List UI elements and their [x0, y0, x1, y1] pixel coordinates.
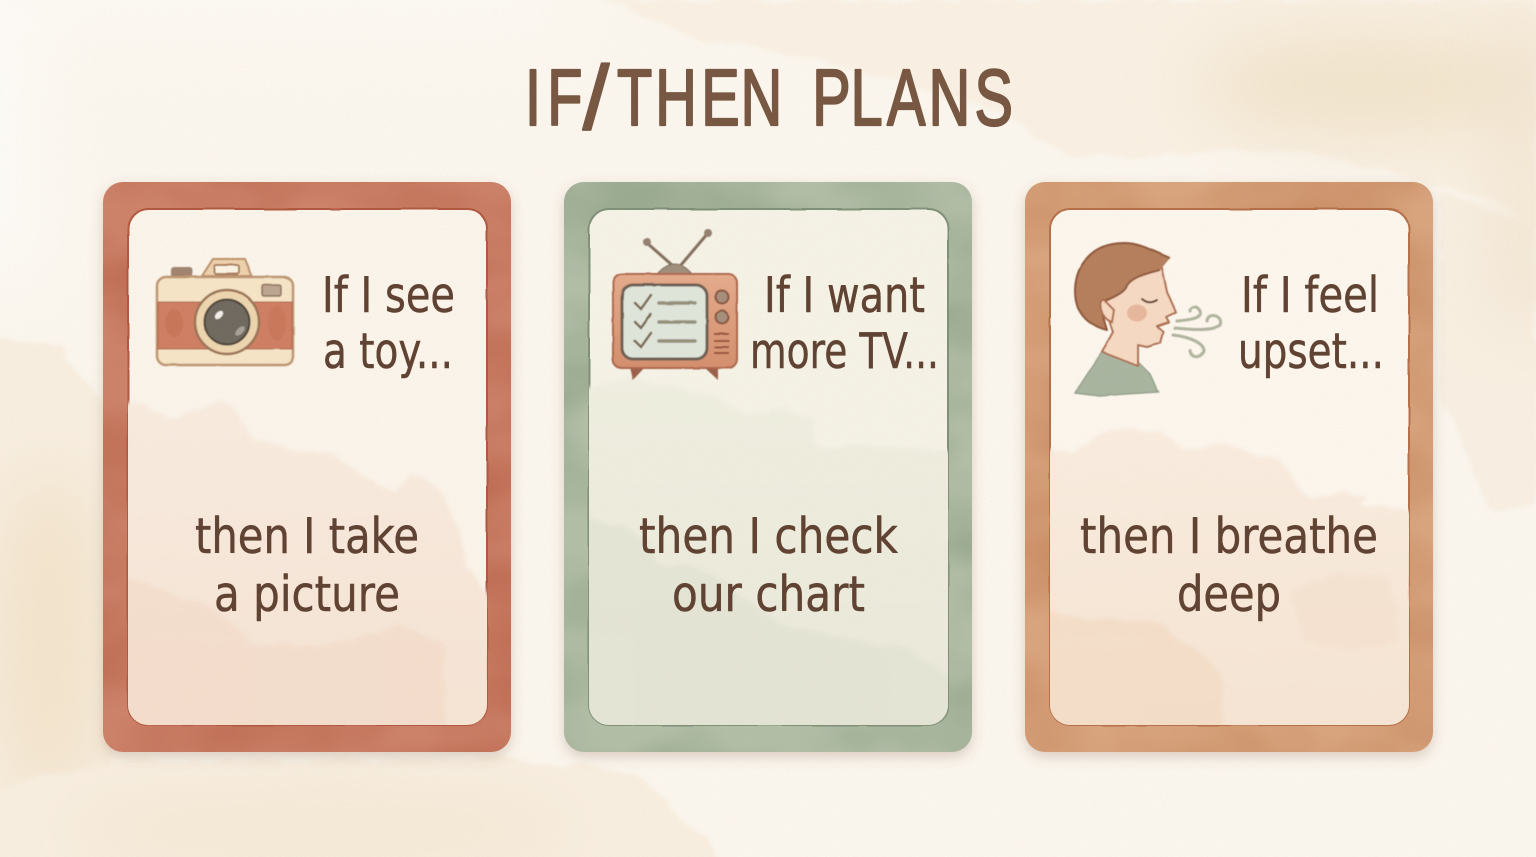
title: THEN PLANS	[617, 53, 1013, 142]
icon: person breathing out	[1075, 243, 1221, 396]
panel: toy card	[103, 182, 511, 752]
text: then: then I check	[639, 508, 899, 565]
text: if: If I want	[764, 267, 925, 324]
watercolor wash	[1042, 428, 1415, 735]
text: then: deep	[1177, 566, 1281, 623]
text: then: our chart	[672, 566, 865, 623]
text: if	[750, 267, 939, 380]
panel: breathe card	[1025, 182, 1433, 752]
watercolor wash	[120, 400, 492, 735]
icon: camera	[157, 259, 293, 365]
text: then	[639, 508, 899, 623]
text: then: a picture	[214, 566, 400, 623]
text: if: upset...	[1238, 323, 1384, 380]
text: if: If I feel	[1241, 267, 1379, 324]
text: if: a toy...	[323, 323, 453, 380]
text: if	[322, 267, 455, 380]
text: if: If I see	[322, 267, 455, 324]
text: if	[1238, 267, 1384, 380]
panel: TV card	[564, 182, 972, 752]
title: /	[583, 49, 610, 149]
watercolor wash	[580, 380, 955, 735]
text: then: then I breathe	[1080, 508, 1378, 565]
text: then	[195, 508, 419, 623]
text: if: more TV...	[750, 323, 939, 380]
text: then	[1080, 508, 1378, 623]
text: then: then I take	[195, 508, 419, 565]
icon: TV with checklist	[613, 229, 737, 380]
title: IF	[525, 53, 582, 142]
